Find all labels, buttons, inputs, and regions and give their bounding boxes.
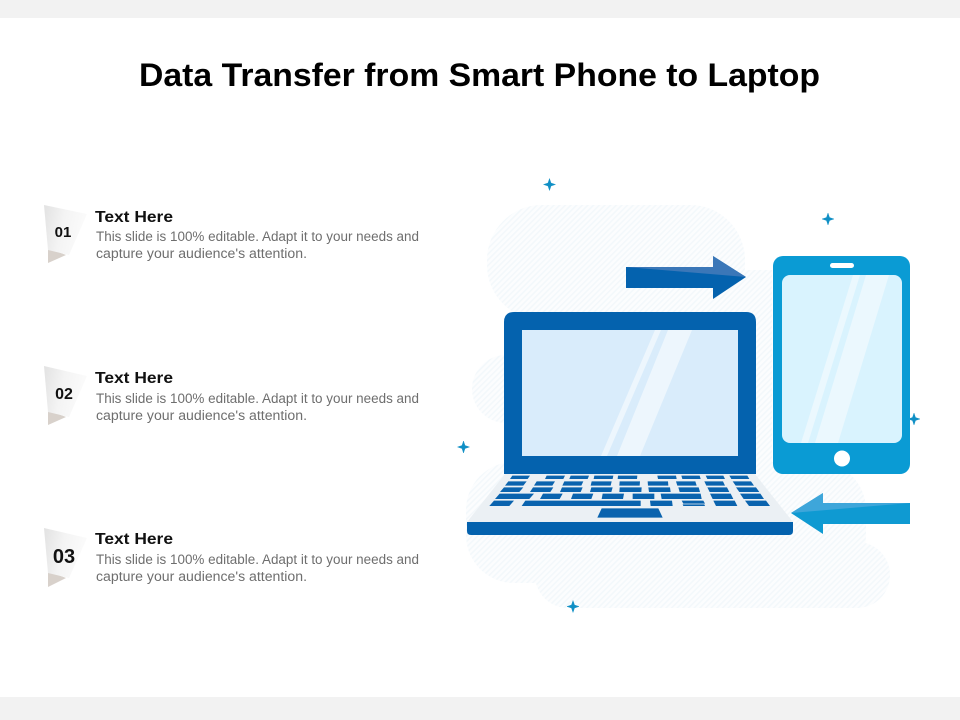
item 02 [44,366,419,425]
title: Data Transfer from Smart Phone to Laptop [139,57,820,93]
icon: sparkles [458,178,920,612]
laptop keyboard deck [467,474,793,522]
arrow: laptop to phone [626,256,746,299]
illustration background blob [466,205,890,608]
badge 02 [44,366,87,425]
body text 03: capture your audience's attention. [96,569,307,584]
laptop screen [504,312,756,474]
heading 03: Text Here [95,531,173,548]
icon: smart phone [773,256,910,474]
body text 01: This slide is 100% editable. Adapt it to your needs and [96,229,419,244]
badge 02: 02 [55,386,73,403]
heading 01: Text Here [95,209,173,226]
body text 01: capture your audience's attention. [96,246,307,261]
badge 03 [44,528,87,587]
item 03 [44,528,419,587]
badge 01 [44,205,87,263]
badge 03: 03 [53,546,75,568]
badge 01: 01 [55,224,71,241]
laptop keys [489,476,770,518]
heading 02: Text Here [95,370,173,387]
item 01 [44,205,419,263]
arrow: phone to laptop [791,493,910,534]
body text 03: This slide is 100% editable. Adapt it to your needs and [96,552,419,567]
body text 02: capture your audience's attention. [96,408,307,423]
body text 02: This slide is 100% editable. Adapt it to your needs and [96,391,419,406]
icon: laptop [467,312,793,535]
laptop base [467,522,793,535]
